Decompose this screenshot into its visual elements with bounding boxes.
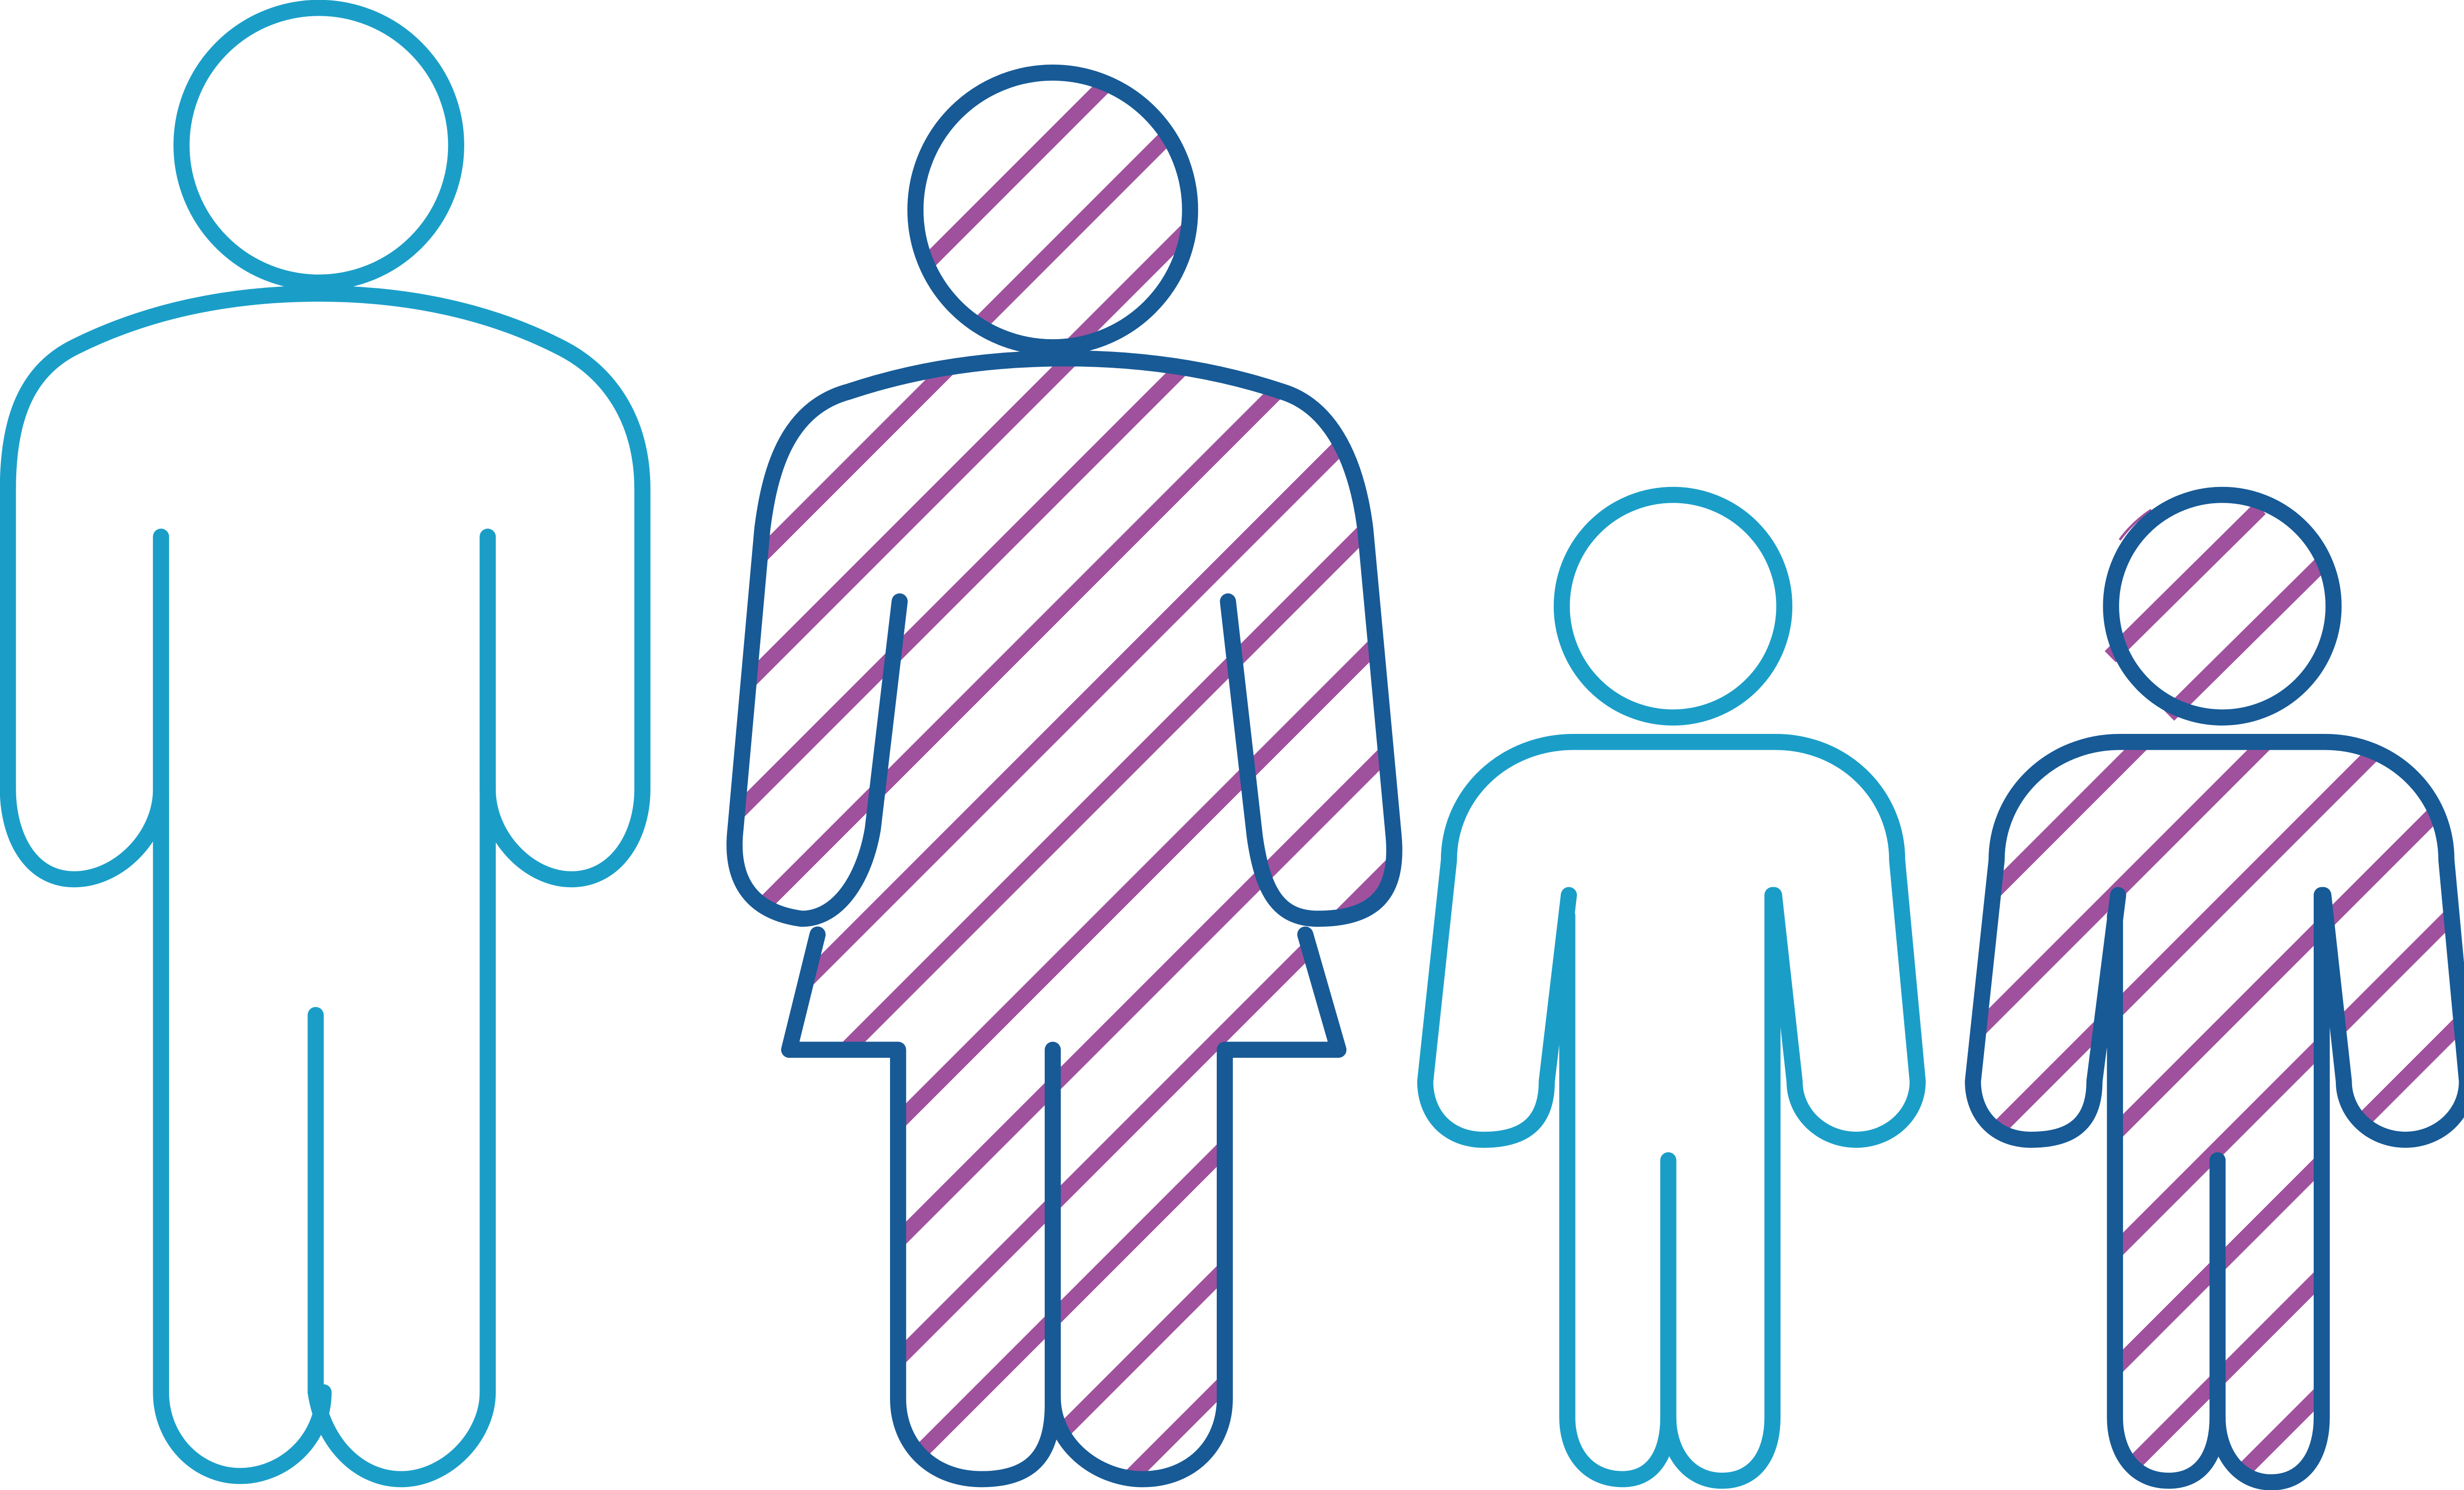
woman head <box>916 72 1190 347</box>
man left leg <box>161 537 324 1476</box>
child head <box>2111 495 2333 718</box>
man torso and arms <box>8 294 643 879</box>
child body hatching <box>1973 731 2464 1489</box>
man right leg <box>316 537 488 1479</box>
child right leg <box>2218 895 2322 1482</box>
figure: adult woman, dark blue outline with purple hatching <box>734 72 1397 1487</box>
woman torso and arms <box>735 358 1394 919</box>
figure: adult man, teal outline <box>8 8 643 1479</box>
boy head <box>1562 495 1784 718</box>
boy right leg <box>1668 895 1773 1481</box>
boy torso and arms <box>1425 742 1917 1140</box>
boy left leg <box>1567 916 1668 1479</box>
woman hatching <box>734 77 1397 1487</box>
man head <box>181 8 456 282</box>
figure: child, dark blue outline with purple hatching <box>1973 495 2464 1489</box>
child left leg <box>2115 916 2218 1481</box>
figure: child, teal outline <box>1425 495 1917 1481</box>
woman skirt and right leg <box>1053 935 1338 1479</box>
child torso and arms <box>1973 742 2464 1140</box>
child head hatching <box>2110 508 2320 715</box>
child head purple offset edge <box>2120 510 2151 540</box>
woman skirt and left leg <box>789 935 1053 1479</box>
